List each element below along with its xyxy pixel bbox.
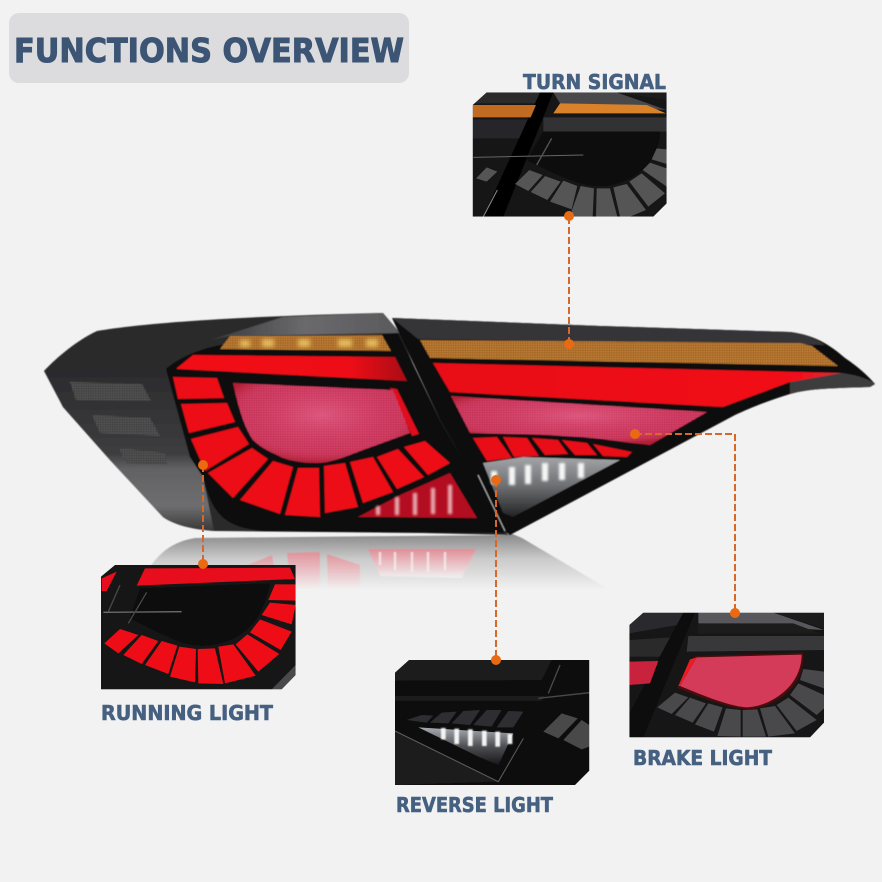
label: reverse light: REVERSE LIGHT [396, 793, 553, 817]
smoked fins [70, 382, 151, 401]
red running bars [177, 355, 842, 407]
panel: brake light [628, 608, 825, 770]
label: turn signal: TURN SIGNAL [523, 70, 666, 94]
callout line: reverse light [491, 475, 501, 660]
panel: turn signal [470, 70, 670, 221]
right lamp body [392, 318, 875, 535]
inset photo: running light [100, 563, 297, 692]
right running light segments [473, 437, 632, 461]
right brake light [451, 396, 707, 445]
left running light segments [173, 377, 450, 517]
left lower triangle lens [358, 473, 477, 518]
inset photo: turn signal [470, 90, 670, 220]
label: brake light: BRAKE LIGHT [633, 746, 772, 770]
callout line: turn signal [564, 217, 574, 349]
connector dot: turn signal [564, 211, 574, 221]
callout line: brake light [630, 429, 735, 613]
inset photo: brake light [628, 612, 825, 738]
panel: running light [100, 559, 297, 725]
label: running light: RUNNING LIGHT [101, 701, 273, 725]
reverse light lens [483, 457, 620, 517]
connector dot: running light [198, 559, 208, 569]
panel: reverse light [393, 655, 592, 817]
floor reflection of the tail lights [146, 533, 610, 590]
amber turn signal strips [220, 335, 838, 366]
inset photo: reverse light [393, 658, 592, 787]
connector dot: reverse light [491, 655, 501, 665]
title: FUNCTIONS OVERVIEW [14, 31, 404, 70]
callout line: running light [198, 460, 208, 565]
left lamp body [44, 313, 508, 535]
title [9, 13, 409, 83]
left brake light [233, 383, 419, 463]
tail light assembly [44, 313, 875, 535]
black inner surround [166, 333, 505, 533]
connector dot: brake light [730, 608, 740, 618]
